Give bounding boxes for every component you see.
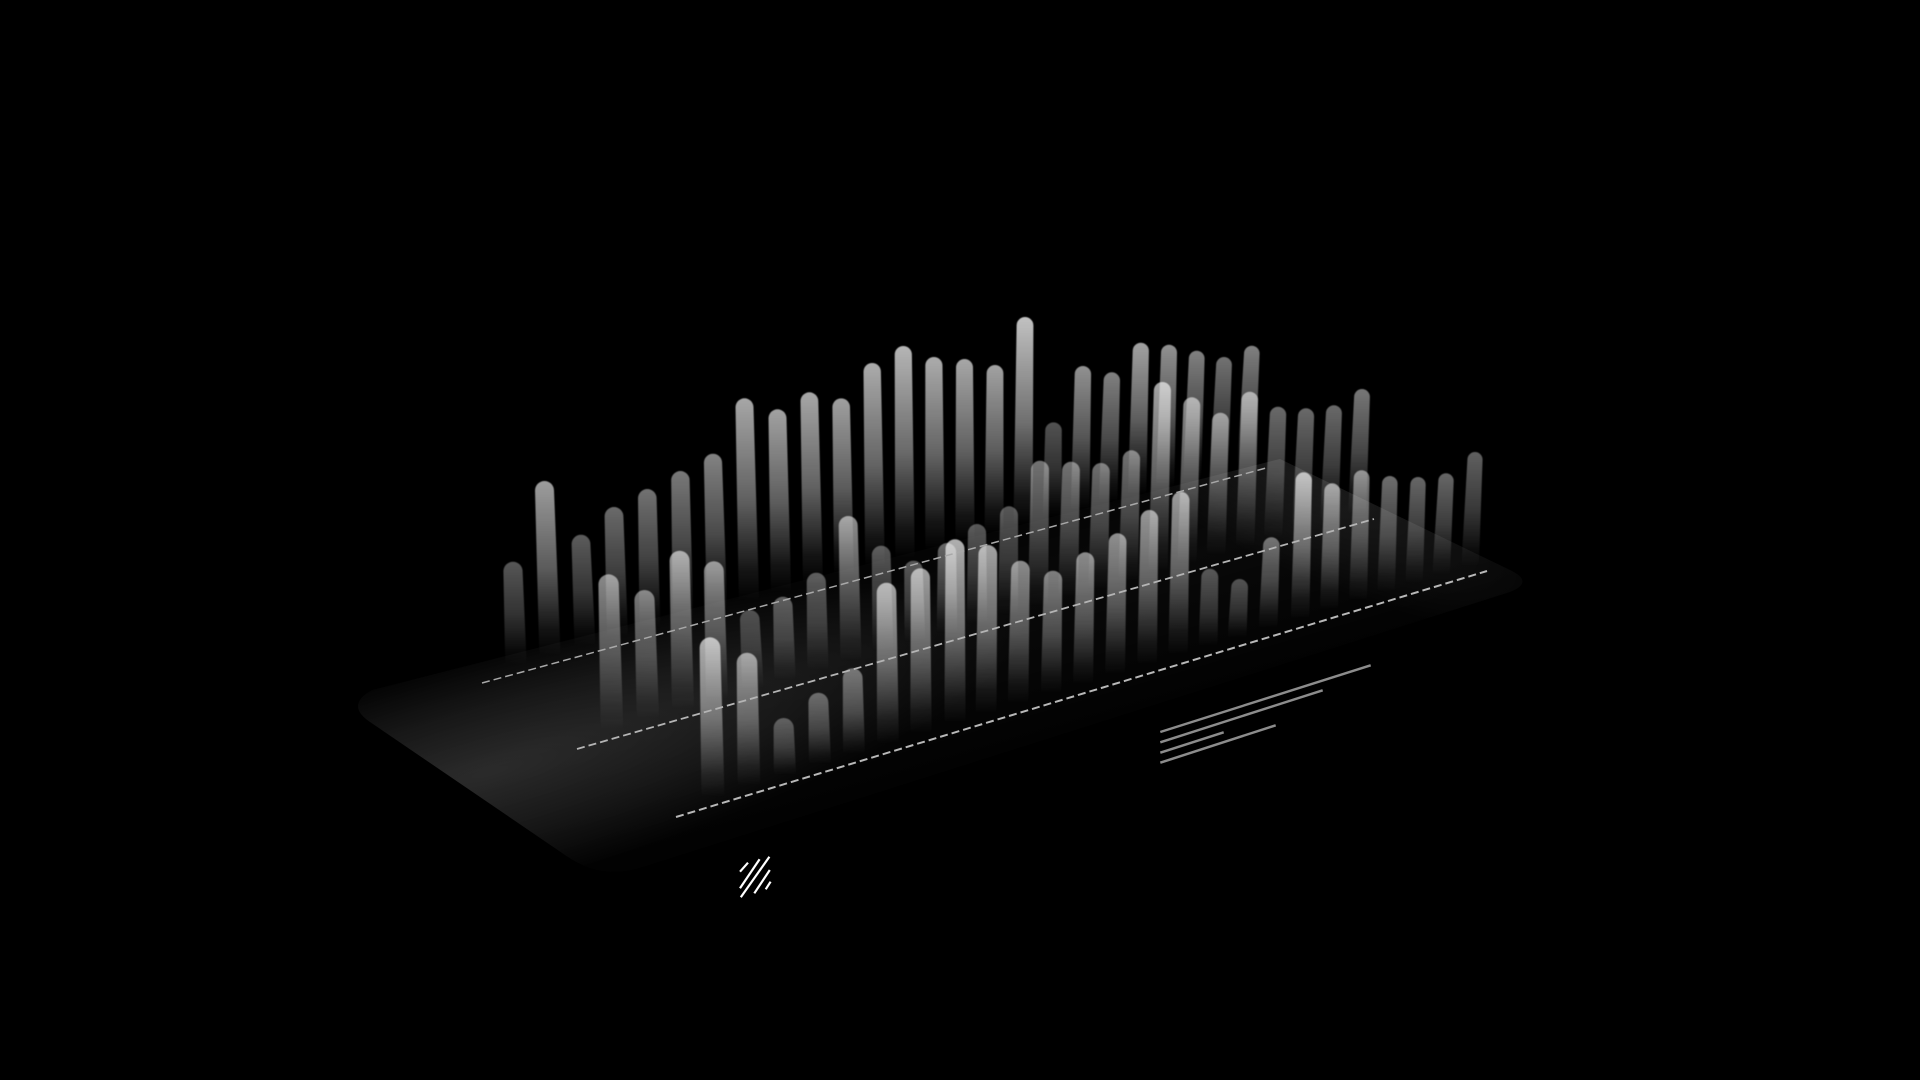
dashed axis: back row [482, 468, 1266, 683]
floor plane [358, 459, 1523, 872]
icon: hatched logo mark [740, 857, 771, 897]
dashed axis: middle row [577, 519, 1374, 749]
middle row of bars [598, 382, 1370, 731]
front row of bars [700, 452, 1483, 798]
dashed axis: front row [676, 571, 1487, 817]
text placeholder lines [1160, 665, 1371, 763]
back row of bars [503, 317, 1260, 666]
